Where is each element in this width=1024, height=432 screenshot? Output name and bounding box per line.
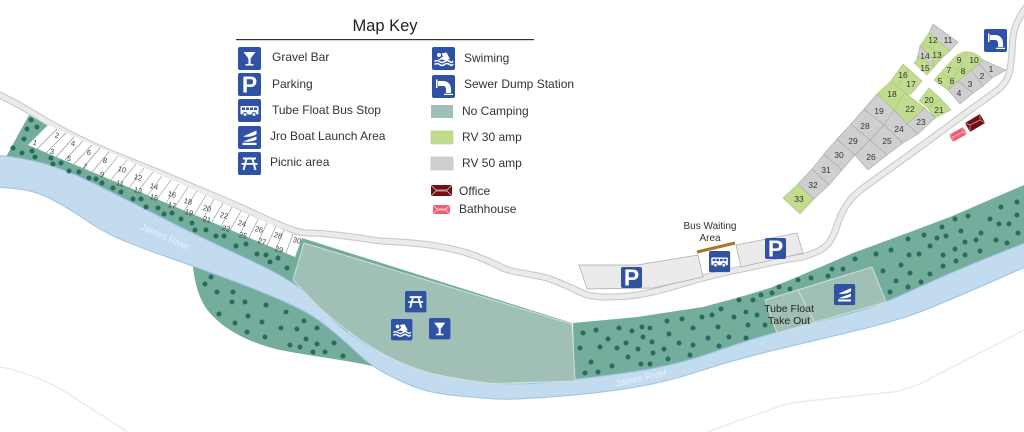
label: bus waiting area: Bus Waiting <box>684 221 736 232</box>
north-east RV lots: 5 <box>938 76 943 86</box>
north-east RV lots: 12 <box>928 35 938 45</box>
key: RV 30 amp <box>431 130 522 144</box>
map key title: Map Key <box>352 17 418 35</box>
north-east RV lots: 24 <box>894 124 904 134</box>
west RV lots 1-30: 14 <box>149 181 159 192</box>
key: sewer dump station <box>432 75 574 98</box>
north-east RV lots: 14 <box>920 51 930 61</box>
west RV lots 1-30: 23 <box>221 223 231 234</box>
icon: picnic area on map <box>405 291 426 312</box>
west RV lots 1-30: 20 <box>202 203 212 214</box>
icon: swimming on map <box>391 319 412 340</box>
key: parking: P <box>242 72 257 98</box>
west RV lots 1-30: 28 <box>273 230 283 241</box>
north-east RV lots: 25 <box>882 136 892 146</box>
key: gravel bar <box>238 47 329 70</box>
west RV lots 1-30: 8 <box>102 156 108 165</box>
label: bus waiting area: Area <box>699 233 721 244</box>
key: swimming: Swiming <box>464 51 509 65</box>
north-east RV lots: 6 <box>950 76 955 86</box>
label: tube float take out: Take Out <box>768 315 810 327</box>
west RV lots 1-30: 21 <box>202 214 212 225</box>
west RV lots 1-30: 17 <box>167 200 177 211</box>
north-east RV lots: 20 <box>924 95 934 105</box>
trees <box>10 118 1020 376</box>
west RV lots 1-30: 7 <box>82 162 88 171</box>
west RV lots 1-30: 2 <box>54 131 60 140</box>
faint line: southeast <box>707 330 1024 432</box>
north-east RV lots: 33 <box>794 194 804 204</box>
key: picnic area <box>238 152 330 175</box>
wooded area: south bank <box>190 260 372 366</box>
west RV lots 1-30: 16 <box>167 189 177 200</box>
west RV lots 1-30: 22 <box>219 210 229 221</box>
north-east RV lots: 29 <box>848 136 858 146</box>
north-east RV lots: 4 <box>957 88 962 98</box>
north-east RV lots: 10 <box>969 55 979 65</box>
west RV lots 1-30: 4 <box>70 139 76 148</box>
north-east RV lots: 30 <box>834 150 844 160</box>
north-east RV lots: 31 <box>821 165 831 175</box>
key: picnic area: Picnic area <box>270 155 330 169</box>
key: RV 50 amp <box>431 156 522 170</box>
north-east RV lots: 3 <box>968 79 973 89</box>
key: no camping <box>431 104 529 118</box>
west RV lots 1-30: 30 <box>292 235 302 246</box>
key: jro boat launch area <box>238 126 386 149</box>
north-east RV lots: 26 <box>866 152 876 162</box>
key: tube float bus stop <box>238 99 381 122</box>
north-east RV lots: 32 <box>808 180 818 190</box>
label: James River east: James River <box>614 367 668 390</box>
map key rule <box>236 39 534 40</box>
north-east RV lots: 15 <box>920 63 930 73</box>
north-east RV lots: 18 <box>887 89 897 99</box>
west RV lots 1-30: 29 <box>274 244 284 255</box>
icon: parking west <box>621 264 642 290</box>
west RV lots 1-30: 13 <box>133 185 143 196</box>
key: parking: Parking <box>272 77 313 91</box>
icon: gravel bar on map <box>429 318 450 339</box>
key: sewer dump station: Sewer Dump Station <box>464 77 574 91</box>
key: no camping: No Camping <box>462 104 529 118</box>
west RV lots 1-30: 1 <box>32 138 38 147</box>
office building <box>965 114 985 132</box>
west RV lots 1-30: 11 <box>115 178 125 189</box>
key: RV 50 amp: RV 50 amp <box>462 156 522 170</box>
west RV lots 1-30: 27 <box>257 236 267 247</box>
key: office <box>431 184 490 198</box>
wooded area: west bank strip <box>0 115 575 385</box>
west RV lots 1-30: 24 <box>237 218 247 229</box>
north-east RV lots: 11 <box>944 35 953 45</box>
west RV lots 1-30: 19 <box>184 207 194 218</box>
bathhouse building <box>949 127 967 142</box>
north-east RV lots: 21 <box>934 105 944 115</box>
icon: boat launch on map <box>834 284 855 305</box>
west RV lots 1-30: 12 <box>133 172 143 183</box>
north-east RV lots: 19 <box>874 106 884 116</box>
map key <box>236 17 574 216</box>
north-east RV lots <box>783 24 1006 214</box>
north-east RV lots: 1 <box>989 64 994 74</box>
west RV lots 1-30: 18 <box>183 196 193 207</box>
road <box>0 6 1024 297</box>
key: tube float bus stop: Tube Float Bus Stop <box>272 103 381 117</box>
tube float take out area <box>765 267 886 333</box>
key: RV 30 amp: RV 30 amp <box>462 130 522 144</box>
west RV lots 1-30: 6 <box>86 148 92 157</box>
west RV lots 1-30: 15 <box>149 192 159 203</box>
parking lot: east <box>736 233 803 267</box>
north-east RV lots: 28 <box>860 121 870 131</box>
parking lot: west <box>579 255 703 289</box>
north-east RV lots: 22 <box>905 104 915 114</box>
west RV lots 1-30: 3 <box>49 147 55 156</box>
label: James River west: James River <box>138 222 191 253</box>
key: gravel bar: Gravel Bar <box>272 50 329 64</box>
key: swimming <box>432 47 509 70</box>
wooded area: east bank <box>573 185 1024 390</box>
key: bathhouse <box>433 202 517 216</box>
west RV lots 1-30: 26 <box>254 224 264 235</box>
north-east RV lots: 23 <box>916 117 926 127</box>
faint line: southwest <box>0 367 127 432</box>
icon: bus stop on map <box>709 251 730 272</box>
icon: parking east <box>765 236 786 262</box>
west RV lots 1-30: 10 <box>117 164 127 175</box>
west RV lots 1-30: 9 <box>99 170 105 179</box>
north-east RV lots: 17 <box>906 79 916 89</box>
west RV lots 1-30: 25 <box>238 230 248 241</box>
key: bathhouse: Bathhouse <box>459 202 517 216</box>
west RV lots 1-30 <box>28 125 302 257</box>
key: jro boat launch area: Jro Boat Launch Area <box>270 129 386 143</box>
bus waiting area shelter <box>697 243 735 252</box>
north-east RV lots: 7 <box>947 65 952 75</box>
west RV lots 1-30: 5 <box>66 154 72 163</box>
no camping area <box>293 243 575 384</box>
label: tube float take out: Tube Float <box>764 303 814 315</box>
north-east RV lots: 13 <box>932 50 942 60</box>
river: James River <box>0 155 1024 399</box>
north-east RV lots: 8 <box>961 66 966 76</box>
north-east RV lots: 9 <box>957 55 962 65</box>
key: office: Office <box>459 184 490 198</box>
icon: sewer dump station on map <box>984 29 1007 52</box>
north-east RV lots: 2 <box>980 71 985 81</box>
key: parking <box>238 72 313 98</box>
north-east RV lots: 16 <box>898 70 908 80</box>
